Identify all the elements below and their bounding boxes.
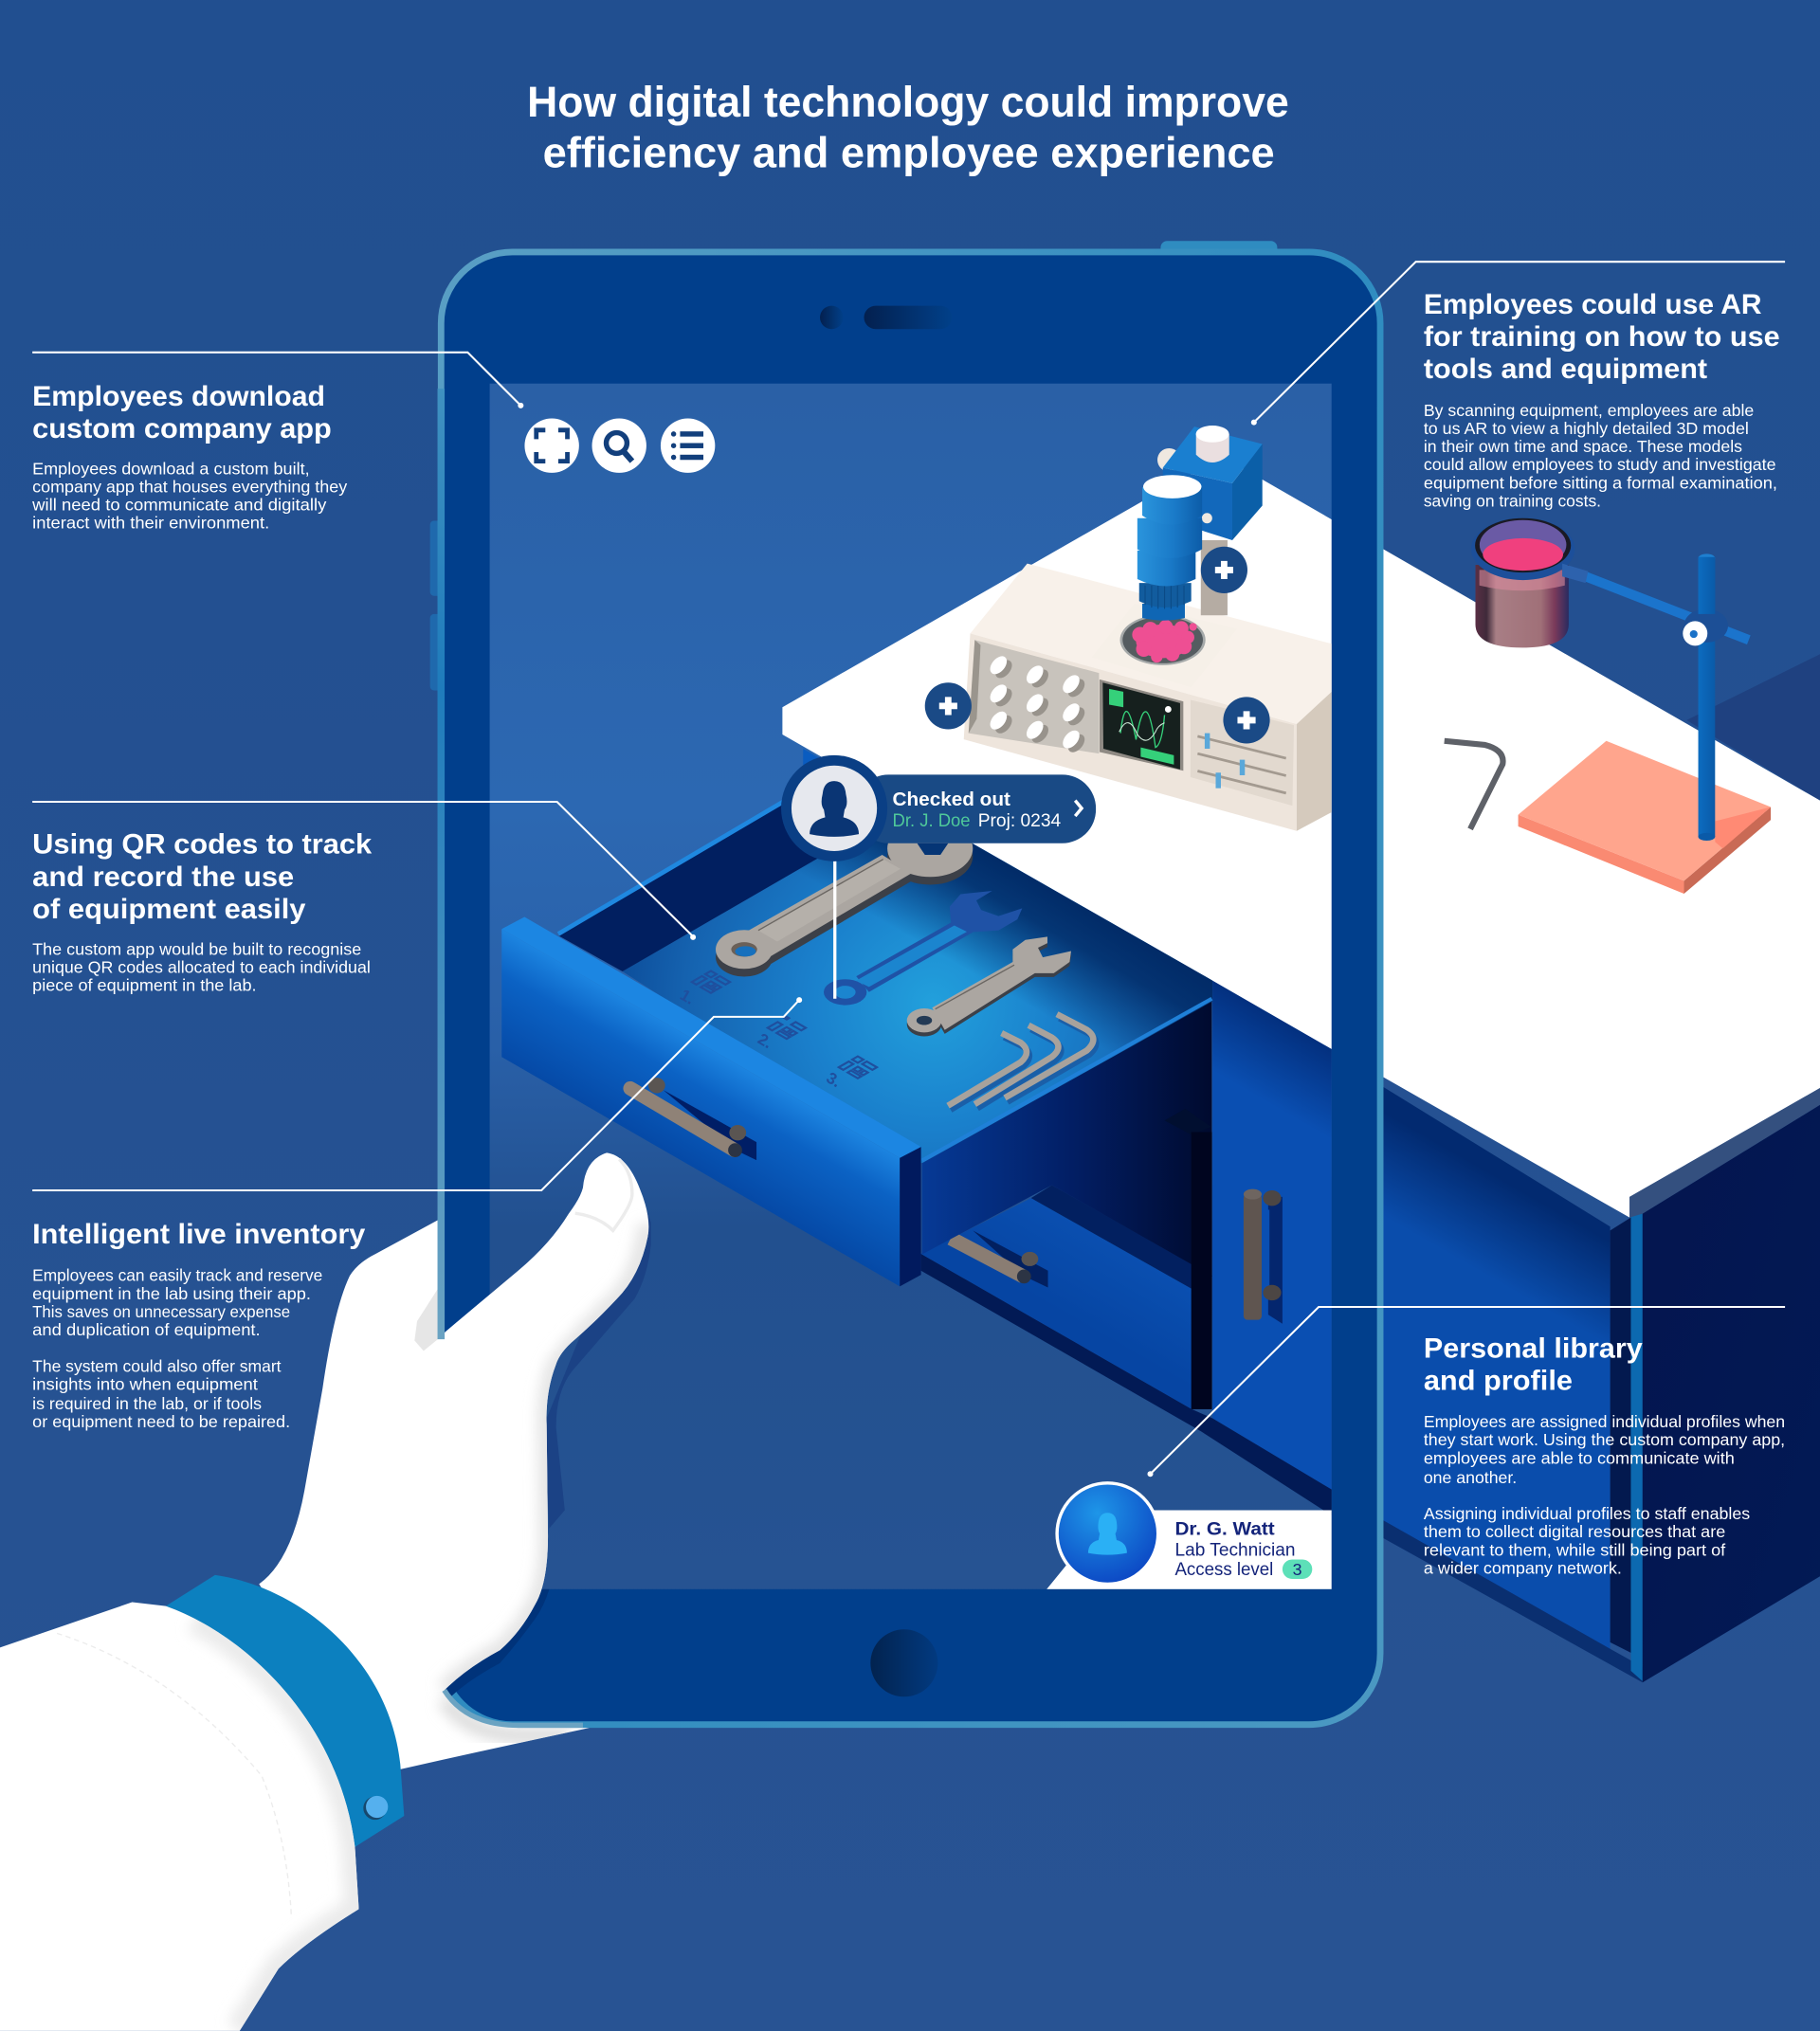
hand shadow on screen xyxy=(544,1189,651,1529)
lower drawer xyxy=(921,1198,1192,1409)
profile access: Access level xyxy=(1174,1560,1273,1580)
tablet top button xyxy=(1160,241,1277,259)
body: will need to communicate and digitally xyxy=(31,496,326,515)
slider panel xyxy=(1191,699,1294,806)
tablet side buttons xyxy=(430,520,446,690)
cabinet xyxy=(921,981,1332,1515)
bench outside tablet xyxy=(782,456,1820,1682)
tablet xyxy=(430,241,1380,1725)
drawer floor xyxy=(623,843,1213,1164)
access badge: 3 xyxy=(1293,1560,1302,1579)
body: piece of equipment in the lab. xyxy=(32,976,257,995)
checked out user: Dr. J. Doe xyxy=(893,811,971,831)
callout: live inventory xyxy=(32,997,802,1431)
body: This saves on unnecessary expense xyxy=(32,1302,290,1321)
callout: checked out xyxy=(781,755,1096,861)
project number: Proj: 0234 xyxy=(978,811,1062,831)
body: interact with their environment. xyxy=(32,514,269,533)
heading xyxy=(1424,289,1780,385)
profile card xyxy=(1046,1483,1332,1589)
icon: ring stand with beaker xyxy=(1445,517,1771,894)
profile role: Lab Technician xyxy=(1174,1540,1296,1560)
callout: download app xyxy=(31,353,523,533)
body: By scanning equipment, employees are able xyxy=(1424,401,1754,420)
icon: scan xyxy=(524,419,579,473)
icon: search xyxy=(592,419,646,473)
heading: tools and equipment xyxy=(1424,354,1707,385)
stand base xyxy=(1519,741,1771,894)
body: is required in the lab, or if tools xyxy=(32,1394,262,1413)
QR label 2: 2. xyxy=(755,1030,775,1052)
QR code 2 xyxy=(768,1017,806,1039)
sleeve shading xyxy=(57,1619,359,2031)
body: equipment before sitting a formal examination, xyxy=(1424,473,1777,492)
heading: Intelligent live inventory xyxy=(32,1219,366,1250)
callout: personal library xyxy=(1147,1307,1785,1577)
body: Employees are assigned individual profiles when xyxy=(1424,1412,1785,1431)
body: equipment in the lab using their app. xyxy=(32,1284,311,1303)
QR code 3 xyxy=(839,1057,877,1079)
drawer front xyxy=(501,917,921,1158)
heading: Employees could use AR xyxy=(1424,289,1762,320)
heading: Using QR codes to track xyxy=(32,829,372,861)
drawer handle xyxy=(630,1078,756,1160)
sleeve xyxy=(0,1603,359,2031)
heading: Personal library xyxy=(1424,1333,1643,1364)
body xyxy=(32,1266,322,1431)
heading: Employees download xyxy=(32,381,325,412)
body: or equipment need to be repaired. xyxy=(32,1412,290,1431)
title: How digital technology could improve xyxy=(527,78,1289,126)
thumbnail xyxy=(575,1159,632,1230)
body xyxy=(31,459,347,533)
title xyxy=(527,78,1289,176)
icon: chevron xyxy=(1075,801,1082,816)
beaker xyxy=(1471,517,1588,647)
door handle xyxy=(1244,1189,1283,1324)
heading xyxy=(1424,1333,1643,1396)
button: add 2 xyxy=(925,682,972,729)
heading: for training on how to use xyxy=(1424,321,1780,353)
stand arm xyxy=(1586,576,1749,640)
hand shadow on bezel xyxy=(445,1589,549,1699)
button: add 1 xyxy=(1201,547,1247,593)
tablet body xyxy=(441,252,1380,1725)
button: add 3 xyxy=(1223,697,1270,744)
microscope xyxy=(1138,426,1263,621)
body: saving on training costs. xyxy=(1424,491,1601,510)
body: Employees download a custom built, xyxy=(32,459,310,478)
cuff button xyxy=(363,1796,388,1820)
hand shape xyxy=(259,1152,648,1769)
wrench: missing outline xyxy=(824,891,1022,1006)
lab coat sleeve xyxy=(0,1575,404,2031)
heading: and profile xyxy=(1424,1365,1573,1396)
QR code 1 xyxy=(692,970,730,993)
leader line xyxy=(32,802,696,940)
cabinet baseboard xyxy=(921,1254,1332,1515)
body: Assigning individual profiles to staff enables xyxy=(1424,1504,1750,1523)
analyzer machine xyxy=(964,564,1332,831)
body: to us AR to view a highly detailed 3D model xyxy=(1424,419,1749,438)
pin connector line xyxy=(834,855,836,999)
allen key xyxy=(1445,741,1502,829)
body: company app that houses everything they xyxy=(32,477,347,496)
body: in their own time and space. These models xyxy=(1424,437,1742,456)
body: The system could also offer smart xyxy=(32,1356,282,1375)
body: a wider company network. xyxy=(1424,1558,1622,1577)
hand shading xyxy=(414,1224,647,1735)
hand xyxy=(259,389,651,1769)
icon: person xyxy=(1088,1513,1127,1555)
body xyxy=(1424,1412,1785,1577)
lower drawer handle xyxy=(951,1230,1048,1287)
body: could allow employees to study and investigate xyxy=(1424,455,1776,474)
heading: custom company app xyxy=(32,413,332,444)
leader line xyxy=(32,997,802,1190)
title: efficiency and employee experience xyxy=(543,128,1275,176)
body xyxy=(1424,401,1777,510)
body: relevant to them, while still being part of xyxy=(1424,1540,1725,1559)
body: insights into when equipment xyxy=(32,1374,258,1393)
body: them to collect digital resources that are xyxy=(1424,1522,1725,1541)
body: Employees can easily track and reserve xyxy=(32,1266,322,1285)
leader line xyxy=(1251,262,1785,426)
bench top xyxy=(782,456,1332,1049)
QR label 3: 3. xyxy=(824,1069,844,1091)
body: they start work. Using the custom company app, xyxy=(1424,1430,1785,1449)
cabinet door xyxy=(1212,981,1332,1490)
icon: list xyxy=(661,419,715,473)
heading xyxy=(32,829,372,925)
body: one another. xyxy=(1424,1468,1517,1487)
checked out label: Checked out xyxy=(893,789,1010,810)
left tablet rim over hand edge xyxy=(439,389,444,1339)
QR label 1: 1. xyxy=(677,986,698,1008)
callout: AR training xyxy=(1251,262,1785,510)
body: The custom app would be built to recognise xyxy=(32,939,361,958)
allen keys xyxy=(948,1014,1096,1110)
body: unique QR codes allocated to each individual xyxy=(32,957,371,976)
leader line xyxy=(32,353,523,408)
tablet screen: AR view xyxy=(490,384,1332,1589)
camera xyxy=(820,306,952,329)
oscilloscope screen xyxy=(1100,680,1183,771)
cuff xyxy=(166,1575,404,1847)
pulled-out drawer xyxy=(501,762,1212,1409)
drawer right wall xyxy=(922,1001,1211,1276)
wrench: large xyxy=(716,843,973,976)
sample plate xyxy=(1092,604,1237,687)
profile name: Dr. G. Watt xyxy=(1174,1518,1275,1539)
heading xyxy=(32,381,332,444)
callout: QR codes xyxy=(32,802,696,995)
access badge xyxy=(1283,1559,1312,1579)
heading: of equipment easily xyxy=(32,894,306,925)
home button xyxy=(870,1629,937,1696)
stand pole xyxy=(1683,553,1728,841)
body xyxy=(32,939,371,995)
wrench: small xyxy=(907,936,1071,1037)
icon: person xyxy=(810,781,859,837)
heading: and record the use xyxy=(32,861,294,893)
drawer left wall xyxy=(559,806,817,971)
body: employees are able to communicate with xyxy=(1424,1448,1735,1467)
tablet corner rim xyxy=(445,1690,583,1725)
body: and duplication of equipment. xyxy=(32,1320,261,1339)
knob panel xyxy=(969,640,1099,755)
leader line xyxy=(1147,1307,1785,1477)
